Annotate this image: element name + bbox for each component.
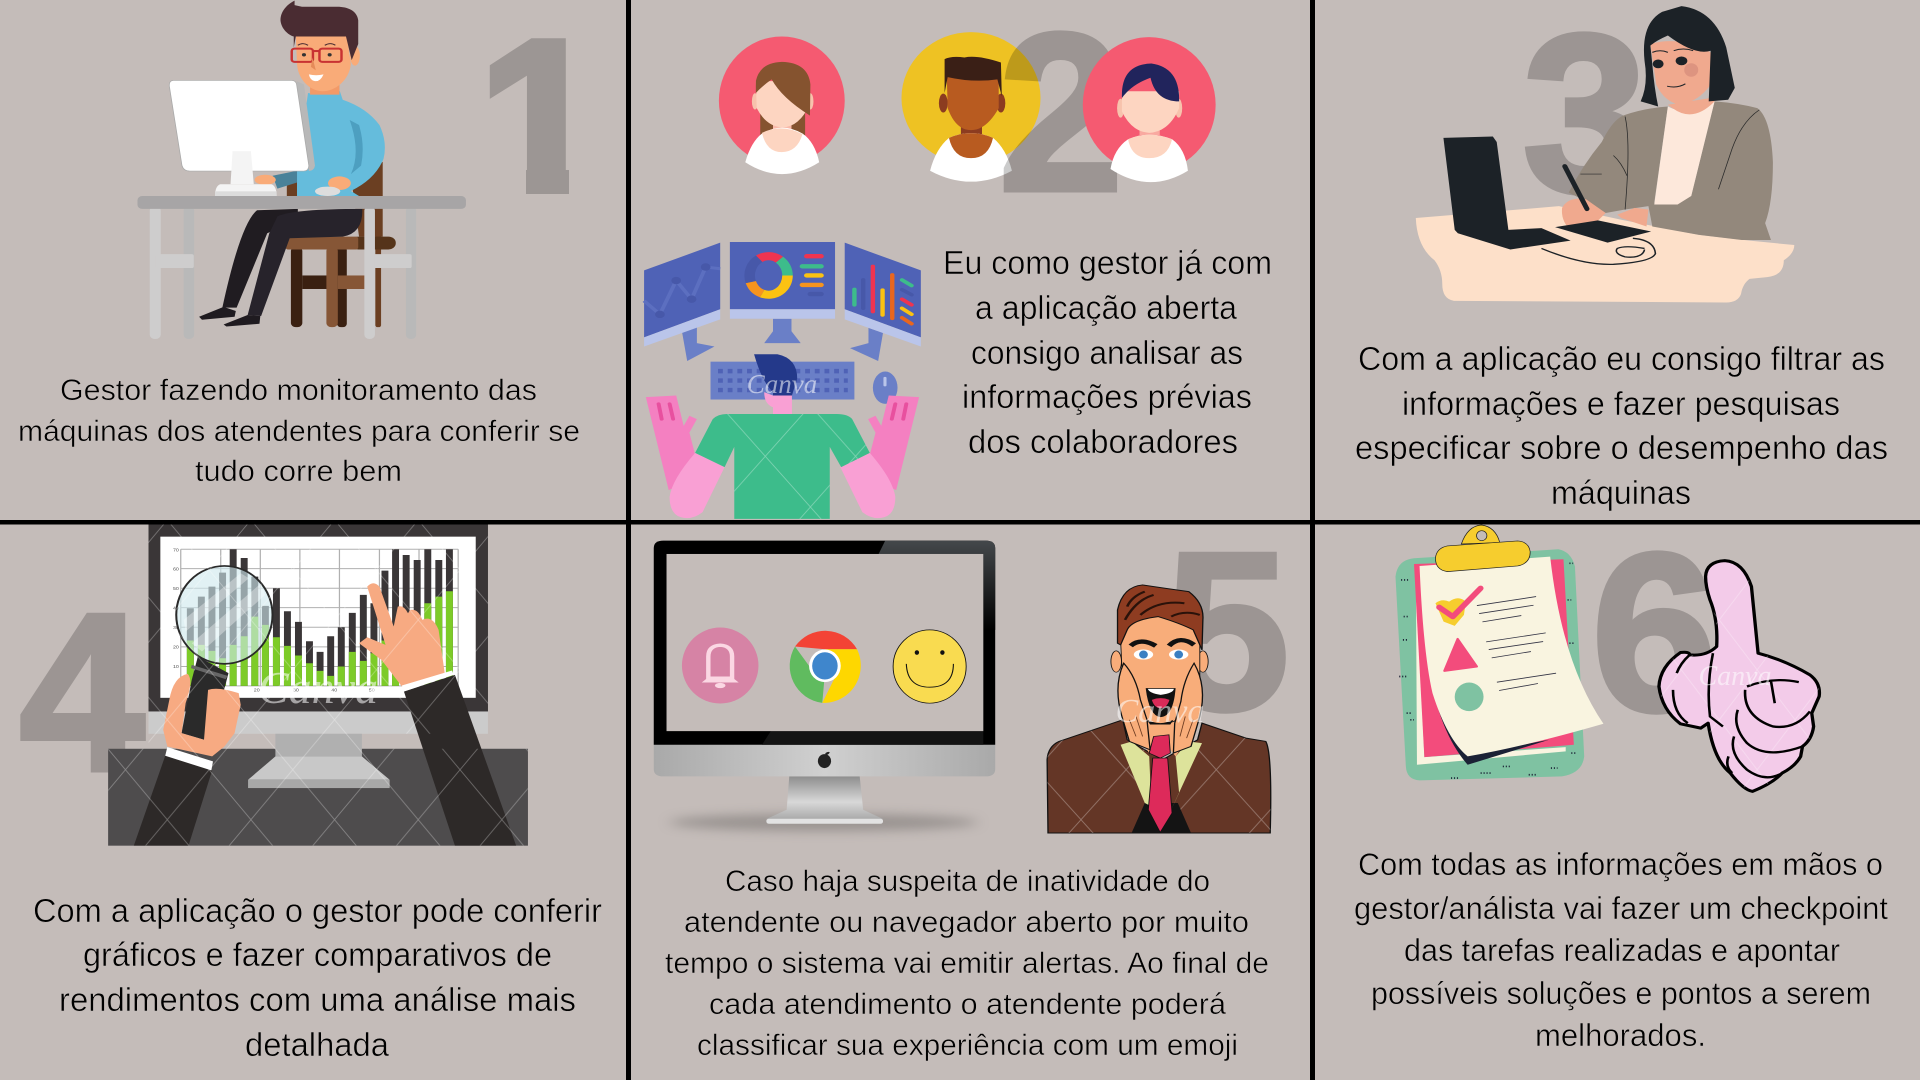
illustration: monitor with chart and magnifier: 70 bbox=[173, 548, 179, 553]
text block 3: máquinas bbox=[1551, 474, 1691, 511]
text block 6: possíveis soluções e pontos a serem bbox=[1371, 975, 1871, 1011]
text block 6: gestor/análista vai fazer um checkpoint bbox=[1354, 890, 1888, 926]
illustration: monitor with chart and magnifier: 30 bbox=[173, 626, 179, 631]
icon: bell bbox=[682, 628, 758, 703]
number 4: 4 bbox=[19, 566, 145, 818]
illustration: analyst with three monitors bbox=[644, 242, 921, 519]
text block 3: Com a aplicação eu consigo filtrar as bbox=[1358, 340, 1885, 377]
illustration: thumbs up bbox=[1659, 561, 1819, 791]
avatar: woman bbox=[719, 37, 845, 174]
illustration: woman with laptop and tablet bbox=[1416, 6, 1794, 303]
avatars row with number 2 bbox=[719, 0, 1216, 238]
illustration: clipboard checklist bbox=[1396, 525, 1603, 780]
illustration: monitor with chart and magnifier: 20 bbox=[173, 645, 179, 650]
text block 2: Eu como gestor já com bbox=[943, 244, 1272, 281]
illustration: monitor with chart and magnifier: 20 bbox=[254, 688, 260, 693]
text block 5: cada atendimento o atendente poderá bbox=[709, 988, 1226, 1021]
illustration: monitor with chart and magnifier: 60 bbox=[173, 567, 179, 572]
illustration: iMac with alert icons bbox=[654, 541, 995, 831]
icon: browser bbox=[790, 631, 861, 703]
text block 3: informações e fazer pesquisas bbox=[1402, 385, 1840, 422]
illustration: monitor with chart and magnifier: 10 bbox=[173, 665, 179, 670]
watermark: Canva: Canva bbox=[1698, 661, 1772, 692]
text block 6 bbox=[1354, 846, 1888, 1053]
text block 4: rendimentos com uma análise mais bbox=[59, 981, 576, 1018]
avatar: person, navy hair bbox=[1083, 37, 1216, 182]
number 5: 5 bbox=[1164, 505, 1290, 757]
illustration: monitor with chart and magnifier: 50 bbox=[173, 586, 179, 592]
panel 5: alerts bbox=[654, 505, 1290, 1062]
illustration: monitor with chart and magnifier: 40 bbox=[331, 688, 338, 693]
illustration: monitor with chart and magnifier: 50 bbox=[369, 688, 375, 693]
panel 2: analysis bbox=[644, 0, 1272, 519]
text block 2 bbox=[943, 244, 1272, 460]
text block 6: das tarefas realizadas e apontar bbox=[1404, 932, 1840, 968]
text block 5 bbox=[665, 865, 1269, 1062]
panel 4: charts bbox=[19, 524, 602, 1063]
number 6: 6 bbox=[1591, 506, 1717, 758]
text block 4 bbox=[33, 892, 602, 1063]
avatar: man, yellow bbox=[901, 32, 1041, 182]
text block 5: classificar sua experiência com um emoji bbox=[697, 1029, 1238, 1062]
icon: smiley bbox=[893, 630, 966, 703]
text block 2: consigo analisar as bbox=[971, 334, 1243, 371]
text block 2: a aplicação aberta bbox=[975, 289, 1238, 326]
watermark: Canva: Canva bbox=[1116, 693, 1204, 730]
text block 2: informações prévias bbox=[962, 378, 1252, 415]
illustration: monitor with chart and magnifier: 30 bbox=[293, 688, 299, 693]
illustration: manager at desk bbox=[137, 1, 466, 339]
illustration: monitor with chart and magnifier bbox=[108, 524, 528, 846]
text block 1: Gestor fazendo monitoramento das bbox=[60, 374, 537, 407]
text block 4: gráficos e fazer comparativos de bbox=[83, 936, 552, 973]
panel 3: filtering bbox=[1355, 0, 1888, 511]
illustration: surprised man bbox=[1047, 585, 1271, 833]
text block 4: detalhada bbox=[245, 1026, 390, 1063]
text block 6: melhorados. bbox=[1535, 1017, 1706, 1053]
text block 1 bbox=[18, 374, 580, 488]
text block 3: especificar sobre o desempenho das bbox=[1355, 429, 1888, 466]
text block 3 bbox=[1355, 340, 1888, 511]
text block 5: Caso haja suspeita de inatividade do bbox=[725, 865, 1210, 898]
text block 6: Com todas as informações em mãos o bbox=[1358, 846, 1883, 882]
watermark: Canva: Canva bbox=[747, 369, 817, 399]
text block 1: tudo corre bem bbox=[195, 455, 402, 488]
watermark: Canva: Canva bbox=[258, 662, 378, 713]
panel 1: monitoring bbox=[18, 0, 604, 488]
text block 2: dos colaboradores bbox=[968, 423, 1238, 460]
number 1: 1 bbox=[478, 0, 604, 245]
illustration: monitor with chart and magnifier: 40 bbox=[173, 606, 179, 611]
panel 6: checkpoint bbox=[1354, 506, 1888, 1053]
text block 1: máquinas dos atendentes para conferir se bbox=[18, 415, 580, 448]
text block 5: atendente ou navegador aberto por muito bbox=[684, 906, 1249, 939]
text block 4: Com a aplicação o gestor pode conferir bbox=[33, 892, 602, 929]
text block 5: tempo o sistema vai emitir alertas. Ao final de bbox=[665, 947, 1269, 980]
